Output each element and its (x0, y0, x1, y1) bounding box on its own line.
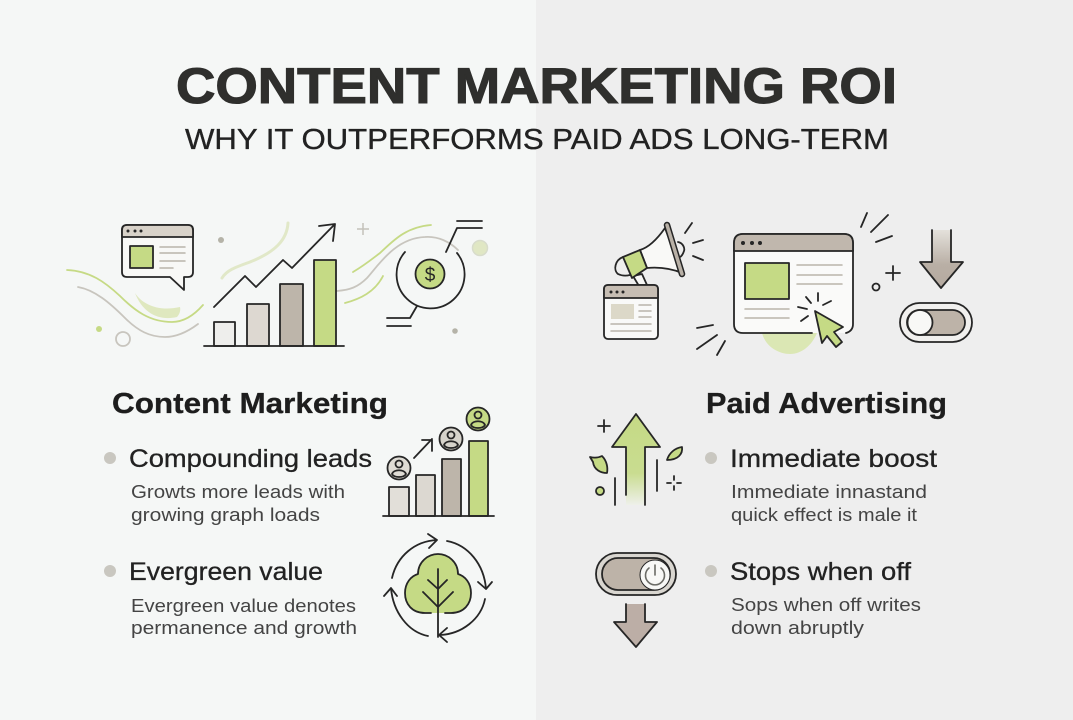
description: immediate boost (731, 482, 927, 525)
bullet: evergreen value (104, 565, 116, 577)
subtitle: WHY IT OUTPERFORMS PAID ADS LONG-TERM (185, 124, 889, 156)
flowing waves and decorative dots (67, 223, 488, 346)
decorative plus and ring (872, 266, 900, 290)
icon: dollar coin with ring (387, 221, 482, 326)
description: immediate boost: quick effect is male it (731, 505, 917, 525)
icon: small browser window (604, 285, 658, 339)
panel: paid advertising column (590, 388, 947, 647)
heading: paid advertising: Paid Advertising (706, 388, 947, 420)
label: evergreen value: Evergreen value (129, 558, 323, 586)
icon: dollar coin with ring: $ (425, 265, 436, 286)
description: evergreen value: Evergreen value denotes (131, 596, 356, 616)
heading: content marketing: Content Marketing (112, 388, 388, 420)
bullet: compounding leads (104, 452, 116, 464)
bullet: immediate boost (705, 452, 717, 464)
description: compounding leads: Growts more leads with (131, 482, 345, 502)
icon: megaphone (615, 223, 703, 286)
label: stops when off: Stops when off (730, 558, 911, 586)
icon: toggle switch (900, 303, 972, 342)
bar chart with rising arrow (204, 224, 344, 346)
description: compounding leads (131, 482, 345, 525)
description: stops when off: Sops when off writes (731, 595, 921, 615)
label: compounding leads: Compounding leads (129, 445, 372, 473)
panel: left background (0, 0, 536, 720)
icon: upward boost arrow with leaves (590, 414, 682, 505)
bullet: stops when off (705, 565, 717, 577)
icon: tree with cycle arrows (384, 534, 492, 642)
description: stops when off: down abruptly (731, 618, 864, 638)
illustration: paid advertising scene (604, 213, 972, 355)
icon: browser speech bubble (122, 225, 193, 290)
icon: lead growth bars with people (383, 408, 494, 516)
arrow: large downward arrow (920, 230, 963, 288)
panel: content marketing column (104, 388, 494, 642)
description: evergreen value (131, 596, 357, 638)
icon: large browser window with cursor (697, 213, 892, 355)
illustration: content marketing growth scene (67, 221, 488, 346)
panel: right background (536, 0, 1073, 720)
description: evergreen value: permanence and growth (131, 618, 357, 638)
description: stops when off (731, 595, 921, 638)
arrow: downward drop arrow (614, 604, 657, 647)
title: CONTENT MARKETING ROI (176, 58, 897, 114)
description: immediate boost: Immediate innastand (731, 482, 927, 502)
icon: power toggle switch (596, 553, 676, 595)
description: compounding leads: growing graph loads (131, 505, 320, 525)
label: immediate boost: Immediate boost (730, 445, 937, 473)
